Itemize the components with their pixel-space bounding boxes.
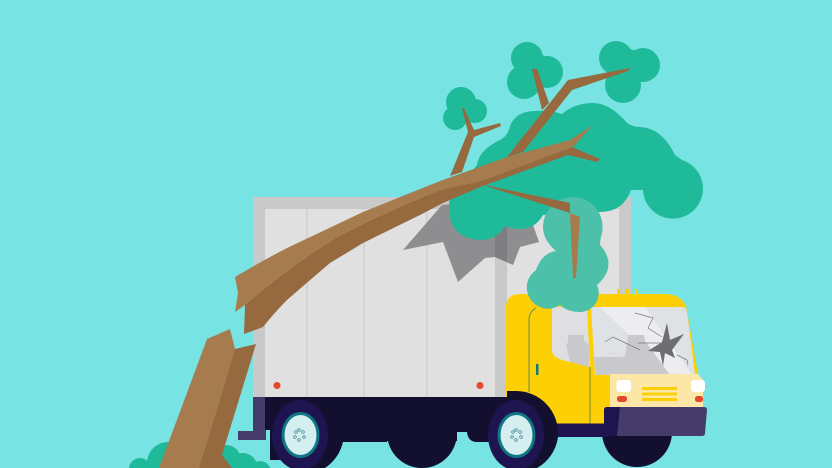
cracks (605, 313, 688, 365)
door lines (529, 308, 590, 424)
rear wheel (272, 400, 328, 468)
rear bumper (238, 397, 266, 440)
cab (506, 289, 705, 424)
impact star (648, 323, 684, 366)
upper right leaf cluster (599, 41, 660, 103)
cab body (506, 294, 703, 424)
front bumper (604, 407, 707, 436)
side window (552, 307, 590, 367)
foliage (443, 41, 703, 240)
upper left leaf cluster (443, 87, 487, 130)
translucent hanging foliage (527, 197, 608, 312)
front wheel (602, 397, 672, 467)
middle wheel (488, 400, 544, 468)
upper middle leaf cluster (507, 42, 563, 99)
lower frame (545, 424, 607, 437)
trunk top (235, 125, 593, 312)
windshield (591, 307, 695, 375)
chassis (265, 391, 558, 468)
side branches (244, 68, 630, 334)
ground bush (129, 442, 271, 468)
main canopy (449, 103, 703, 240)
cargo box (253, 197, 631, 397)
fallen tree (159, 68, 630, 468)
impact hole (403, 200, 539, 282)
trunk base (159, 329, 256, 468)
grille panel (610, 374, 705, 407)
hanging branch (570, 213, 580, 278)
truck (238, 197, 707, 468)
